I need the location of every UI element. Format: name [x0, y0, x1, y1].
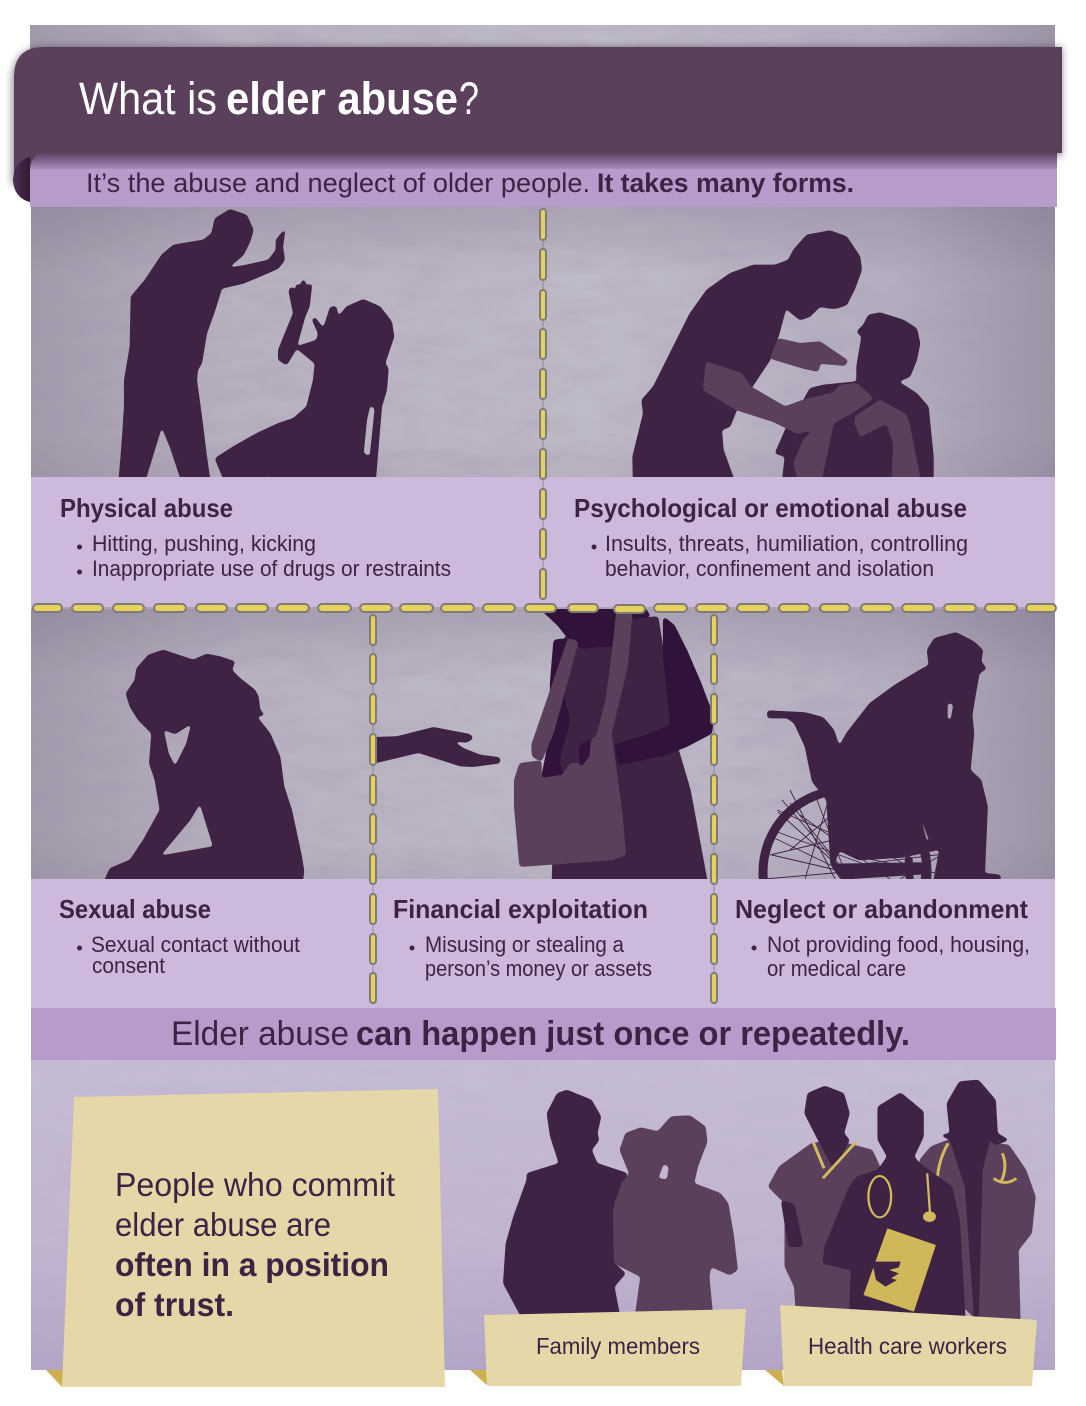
- tag: health care workers: Health care workers: [808, 1333, 1007, 1359]
- banner: can happen once or repeatedly: [31, 1008, 1056, 1060]
- illustration: sexual abuse silhouette: [102, 650, 304, 887]
- text block: psychological or emotional abuse: behavior, confinement and isolation: [605, 556, 934, 581]
- title banner: elder abuse: [226, 73, 458, 124]
- person and chair: [767, 632, 1001, 887]
- text block: psychological or emotional abuse: Psychological or emotional abuse: [574, 493, 967, 523]
- wheel: [758, 790, 938, 879]
- title banner: What is: [79, 73, 217, 124]
- hand: [872, 1262, 901, 1287]
- text block: neglect or abandonment: or medical care: [767, 956, 906, 981]
- illustration: health care workers silhouettes: [768, 1080, 1035, 1322]
- background: top strip: [30, 25, 1055, 207]
- text block: financial exploitation: Financial exploitation: [393, 894, 648, 924]
- callout: people in a position of trust: of trust.: [115, 1286, 234, 1323]
- text block: neglect or abandonment: Neglect or abandonment: [735, 894, 1028, 924]
- nurse collar: [813, 1142, 856, 1178]
- panel: abuse types label band, lower: [31, 879, 1055, 1009]
- decorative stitching, vertical top: [540, 209, 546, 600]
- curl of the ribbon: [13, 157, 30, 202]
- panel: physical and psychological illustrations background: [31, 207, 1055, 477]
- decorative stitching, vertical right: [711, 615, 717, 1004]
- text block: financial exploitation: person’s money or assets: [425, 956, 652, 981]
- decorative stitching, horizontal: [33, 604, 1056, 613]
- title banner: ?: [459, 73, 479, 124]
- nurse in scrubs: [768, 1086, 925, 1317]
- text block: psychological or emotional abuse: [574, 493, 968, 581]
- illustration: physical abuse silhouettes: [118, 209, 394, 487]
- text block: physical abuse: [60, 493, 451, 581]
- text block: sexual abuse: Sexual contact without: [91, 932, 300, 957]
- subtitle band: It’s the abuse and neglect of older people.: [86, 168, 590, 198]
- callout: people in a position of trust: People who commit: [115, 1166, 395, 1203]
- text block: physical abuse: Hitting, pushing, kicking: [92, 531, 316, 556]
- text block: financial exploitation: Misusing or stealing a: [425, 932, 625, 957]
- tag: family members: [470, 1309, 746, 1386]
- callout: people in a position of trust: [46, 1089, 445, 1387]
- panel: who commits abuse background: [31, 1060, 1055, 1370]
- subtitle band: It takes many forms.: [597, 168, 854, 198]
- banner: can happen once or repeatedly: can happen just once or repeatedly.: [356, 1015, 910, 1053]
- illustration: family members silhouettes: [503, 1090, 737, 1317]
- illustration: financial exploitation, woman with bag: [514, 603, 714, 887]
- stethoscope: [868, 1173, 936, 1222]
- banner: can happen once or repeatedly: Elder abuse: [171, 1015, 349, 1053]
- callout: people in a position of trust: elder abuse are: [115, 1206, 331, 1243]
- panel: abuse types label band, upper: [31, 477, 1055, 609]
- text block: sexual abuse: [59, 894, 300, 978]
- text block: neglect or abandonment: [735, 894, 1030, 981]
- text block: psychological or emotional abuse: Insults, threats, humiliation, controlling: [605, 531, 968, 556]
- coat stethoscope: [937, 1143, 1016, 1182]
- illustration: psychological abuse silhouettes: [633, 231, 933, 487]
- doctor with clipboard: [823, 1093, 965, 1318]
- clipboard: [863, 1228, 936, 1312]
- callout: people in a position of trust: often in a position: [115, 1246, 389, 1283]
- text block: sexual abuse: Sexual abuse: [59, 894, 211, 924]
- text block: financial exploitation: [393, 894, 652, 981]
- doctor in coat: [920, 1080, 1035, 1322]
- subtitle band: [30, 153, 1057, 207]
- panel: sexual, financial and neglect illustrations background: [31, 609, 1055, 879]
- decorative stitching, vertical left: [370, 615, 376, 1004]
- text block: sexual abuse: consent: [92, 953, 165, 978]
- text block: physical abuse: Physical abuse: [60, 493, 233, 523]
- tag: family members: Family members: [536, 1333, 700, 1359]
- illustration: financial exploitation, reaching hand: [373, 727, 500, 767]
- text block: neglect or abandonment: Not providing food, housing,: [767, 932, 1030, 957]
- tag: health care workers: [765, 1305, 1037, 1386]
- illustration: neglect, person in wheelchair: [758, 632, 1001, 879]
- title banner: [12, 47, 1062, 202]
- text block: physical abuse: Inappropriate use of drugs or restraints: [92, 556, 451, 581]
